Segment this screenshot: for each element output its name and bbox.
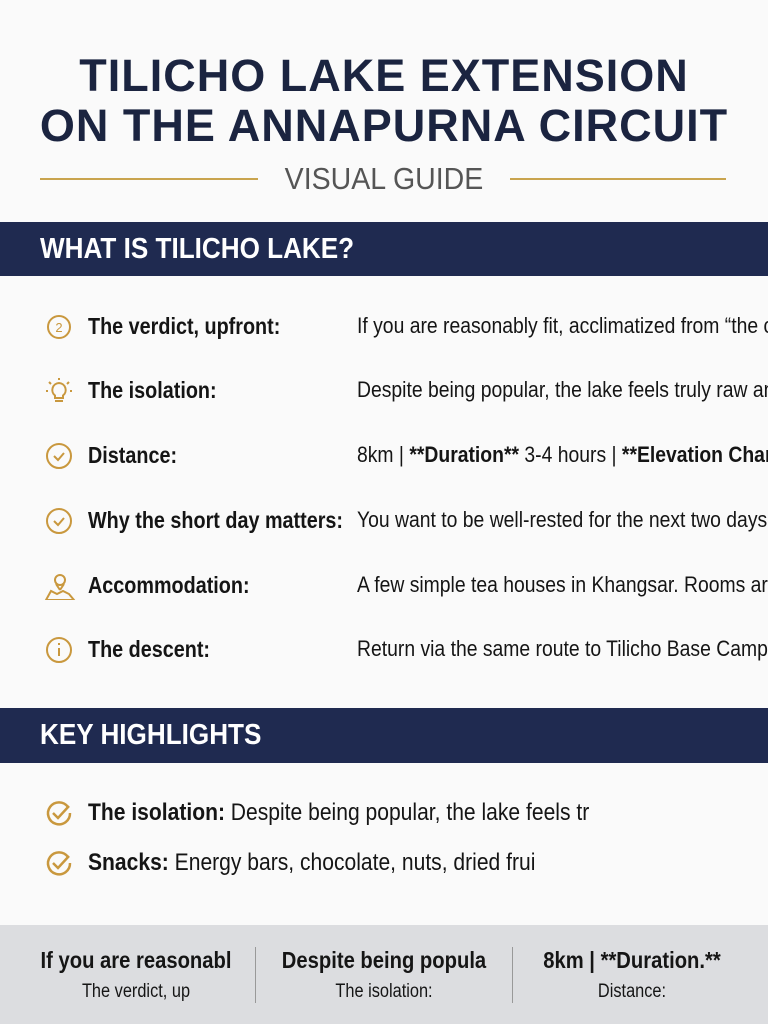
row: isolation: The isolation:	[88, 377, 217, 403]
stat 3: 8km | **Duration.**	[543, 947, 721, 973]
footer stats panel	[0, 925, 768, 1024]
stat 2	[282, 947, 486, 1002]
stat 2: The isolation:	[335, 981, 433, 1002]
highlight: isolation: The isolation: Despite being popular, the lake feels tr	[88, 799, 589, 826]
row: distance	[46, 442, 768, 469]
heading: what is tilicho lake: WHAT IS TILICHO LAKE?	[40, 232, 354, 264]
title: ON THE ANNAPURNA CIRCUIT	[40, 100, 728, 151]
row: descent: Return via the same route to Tilicho Base Camp.	[357, 636, 768, 661]
panel: facts list	[44, 313, 768, 663]
heading: key highlights	[0, 708, 768, 763]
stat 3	[543, 947, 721, 1002]
stat 1: If you are reasonabl	[41, 947, 231, 973]
row: short day	[46, 507, 768, 534]
row: short day: You want to be well-rested for the next two days.	[357, 507, 768, 532]
title	[40, 50, 728, 151]
row: distance: Distance:	[88, 442, 177, 468]
row: descent	[46, 636, 768, 663]
row: short day: Why the short day matters:	[88, 507, 343, 533]
row: verdict: 2	[55, 320, 63, 335]
stat 3: Distance:	[598, 981, 666, 1002]
heading: what is tilicho lake	[0, 222, 768, 276]
stat 1: The verdict, up	[82, 981, 190, 1002]
stat 1	[41, 947, 231, 1002]
highlight: snacks: Snacks: Energy bars, chocolate, nuts, dried frui	[88, 849, 535, 876]
stat 2: Despite being popula	[282, 947, 486, 973]
row: verdict: The verdict, upfront:	[88, 313, 280, 339]
row: isolation	[46, 377, 768, 403]
row: accommodation	[44, 572, 768, 600]
subtitle: VISUAL GUIDE	[285, 161, 483, 196]
title: TILICHO LAKE EXTENSION	[79, 50, 689, 101]
row: descent: The descent:	[88, 636, 210, 662]
row: verdict	[47, 313, 768, 339]
row: accommodation: Accommodation:	[88, 572, 250, 598]
heading: key highlights: KEY HIGHLIGHTS	[40, 719, 261, 751]
